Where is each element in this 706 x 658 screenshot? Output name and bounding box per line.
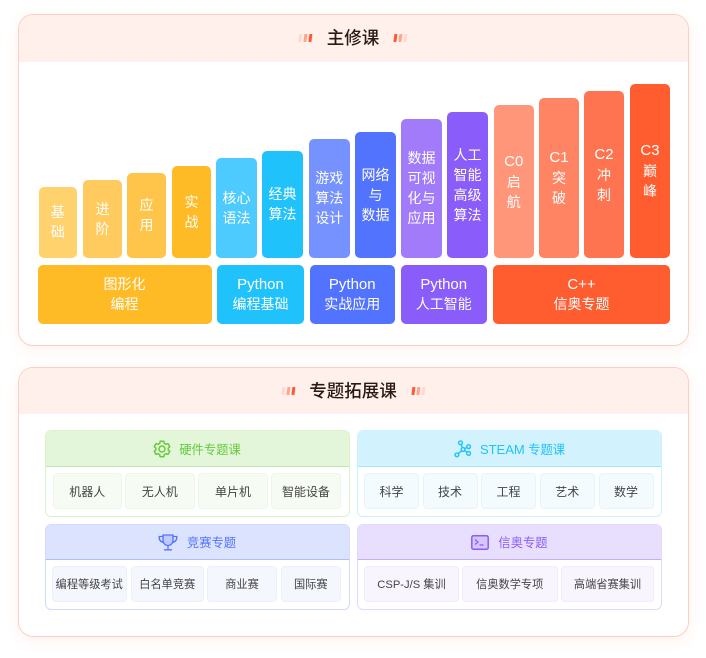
group header: 竞赛专题 <box>46 525 348 560</box>
bar: 人工智能高级算法: 人工 <box>454 147 482 163</box>
track: 图形化编程: 编程 <box>110 296 138 312</box>
track: Python 人工智能 <box>400 265 487 324</box>
icon: gear <box>154 440 170 458</box>
item: 智能设备: 智能设备 <box>282 484 330 498</box>
bar: C3 巅峰: 巅 <box>643 163 657 179</box>
item: 科学: 科学 <box>379 484 404 498</box>
bar: 网络与数据: 网络 <box>362 166 390 182</box>
track: Python 编程基础 <box>217 265 304 324</box>
item: CSP-J/S 集训 <box>364 566 459 602</box>
item: 技术 <box>422 473 478 509</box>
icon: right ticks of extension heading <box>412 387 426 395</box>
icon: right ticks of main heading <box>394 34 408 42</box>
item: 单片机 <box>198 473 268 509</box>
item: 高端省赛集训 <box>561 566 654 602</box>
item: 工程: 工程 <box>496 484 520 498</box>
group header: 硬件专题课 <box>46 431 348 467</box>
bar: 基础 <box>38 187 77 258</box>
bar: C3 巅峰: 峰 <box>643 183 657 199</box>
panel: main courses <box>18 14 688 346</box>
bar: C1 突破 <box>539 98 579 258</box>
bar: C1 突破: C1 <box>549 149 569 166</box>
track: Python 人工智能: 人工智能 <box>416 296 472 312</box>
panel: extension courses <box>18 367 688 637</box>
item: 白名单竞赛 <box>131 566 204 602</box>
bar: 应用 <box>127 173 166 258</box>
item: 智能设备 <box>271 473 341 509</box>
bar: C2 冲刺: 刺 <box>597 187 611 203</box>
bar: C0 启航: 航 <box>507 194 521 210</box>
track: C++ 信奥专题 <box>493 265 670 324</box>
bar: 核心语法 <box>216 158 257 258</box>
item: 数学 <box>598 473 654 509</box>
item: 艺术: 艺术 <box>555 484 579 498</box>
group: 信奥专题 <box>357 524 662 610</box>
bar: 核心语法: 核心 <box>222 190 250 206</box>
bar: C2 冲刺: 冲 <box>597 167 611 183</box>
heading: extension courses: 专题拓展课 <box>309 381 397 401</box>
header band: main courses <box>19 15 688 62</box>
item: 科学 <box>364 473 419 509</box>
track: Python 实战应用: Python <box>329 276 376 293</box>
group header: 硬件专题课: 硬件专题课 <box>179 442 241 456</box>
group: 竞赛专题 <box>44 524 350 610</box>
bar: 实战: 战 <box>184 214 198 230</box>
item: 国际赛: 国际赛 <box>294 579 328 591</box>
bar: 游戏算法设计: 设计 <box>315 210 343 226</box>
track: Python 实战应用: 实战应用 <box>324 296 380 312</box>
item: 商业赛: 商业赛 <box>225 579 259 591</box>
item: CSP-J/S 集训: CSP-J/S 集训 <box>377 579 446 591</box>
bar: 人工智能高级算法: 高级 <box>454 187 482 203</box>
item: 无人机 <box>125 473 194 509</box>
track: C++ 信奥专题: 信奥专题 <box>554 296 610 312</box>
bar: C3 巅峰 <box>630 84 670 258</box>
bar: 人工智能高级算法: 智能 <box>454 167 482 183</box>
item: 编程等级考试: 编程等级考试 <box>56 579 123 591</box>
bar: C0 启航 <box>494 105 534 258</box>
group header: STEAM 专题课: STEAM 专题课 <box>480 442 565 456</box>
bar: C3 巅峰: C3 <box>640 142 660 159</box>
item: 数学: 数学 <box>614 484 638 498</box>
bar: 经典算法: 经典 <box>268 186 296 202</box>
bar: C0 启航: C0 <box>504 153 523 170</box>
icon: left ticks of extension heading <box>282 387 296 395</box>
bar: 进阶 <box>83 180 122 258</box>
item: 单片机: 单片机 <box>215 484 251 498</box>
item: 白名单竞赛: 白名单竞赛 <box>139 579 195 591</box>
item: 信奥数学专项: 信奥数学专项 <box>476 579 543 591</box>
track: C++ 信奥专题: C++ <box>567 276 596 293</box>
item: 国际赛 <box>281 566 340 602</box>
bar: 游戏算法设计: 游戏 <box>315 170 343 186</box>
item: 无人机: 无人机 <box>142 484 178 498</box>
bar: 基础: 基 <box>51 204 65 220</box>
bar: 应用: 用 <box>140 217 154 233</box>
track: Python 人工智能: Python <box>420 276 467 293</box>
bar: 人工智能高级算法: 算法 <box>454 207 482 223</box>
bar: C0 启航: 启 <box>507 174 521 190</box>
item: 高端省赛集训: 高端省赛集训 <box>574 579 641 591</box>
track: Python 编程基础: 编程基础 <box>232 296 288 312</box>
bar: 经典算法 <box>262 151 303 258</box>
icon: terminal <box>471 535 489 550</box>
bar: 数据可视化与应用: 化与 <box>408 190 436 206</box>
bar: C1 突破: 突 <box>552 170 566 186</box>
item: 商业赛 <box>207 566 277 602</box>
item: 信奥数学专项 <box>462 566 558 602</box>
bar: 核心语法: 语法 <box>222 210 250 226</box>
bar: 数据可视化与应用 <box>401 119 442 258</box>
item: 机器人: 机器人 <box>69 484 105 498</box>
bar: 数据可视化与应用: 可视 <box>408 170 436 186</box>
icon: left ticks of main heading <box>298 34 312 42</box>
group header: STEAM 专题课 <box>358 431 661 467</box>
track: 图形化编程: 图形化 <box>104 276 146 292</box>
bar: C2 冲刺 <box>584 91 624 258</box>
item: 艺术 <box>540 473 594 509</box>
bar: 人工智能高级算法 <box>447 112 488 258</box>
bar: 进阶: 进 <box>96 201 110 217</box>
item: 编程等级考试 <box>52 566 127 602</box>
bar: 经典算法: 算法 <box>268 206 296 222</box>
bar: 应用: 应 <box>140 197 154 213</box>
bar: 网络与数据: 与 <box>368 186 382 202</box>
group: 硬件专题课 <box>44 430 350 516</box>
icon: trophy <box>158 534 178 550</box>
item: 工程 <box>481 473 536 509</box>
bar: 基础: 础 <box>51 224 65 240</box>
bar: C2 冲刺: C2 <box>594 146 614 163</box>
bar: 进阶: 阶 <box>96 221 110 237</box>
track: 图形化编程 <box>38 265 212 324</box>
header band: extension courses <box>19 368 688 414</box>
heading: main courses: 主修课 <box>327 28 379 48</box>
bar: 网络与数据 <box>355 132 396 258</box>
bar: 实战: 实 <box>184 194 198 210</box>
bar: 游戏算法设计 <box>309 139 350 258</box>
group header: 信奥专题: 信奥专题 <box>498 536 548 550</box>
bar: 数据可视化与应用: 数据 <box>408 150 436 166</box>
bar: 游戏算法设计: 算法 <box>315 190 343 206</box>
bar: 数据可视化与应用: 应用 <box>408 210 436 226</box>
icon: molecule nodes <box>454 440 472 458</box>
item: 技术: 技术 <box>438 484 462 498</box>
group: STEAM 专题课 <box>357 430 662 516</box>
group header: 竞赛专题: 竞赛专题 <box>187 536 236 550</box>
track: Python 编程基础: Python <box>237 276 284 293</box>
bar: 实战 <box>172 166 211 258</box>
track: Python 实战应用 <box>310 265 395 324</box>
item: 机器人 <box>52 473 122 509</box>
group header: 信奥专题 <box>358 525 661 560</box>
bar: C1 突破: 破 <box>552 190 566 206</box>
bar: 网络与数据: 数据 <box>362 206 390 222</box>
